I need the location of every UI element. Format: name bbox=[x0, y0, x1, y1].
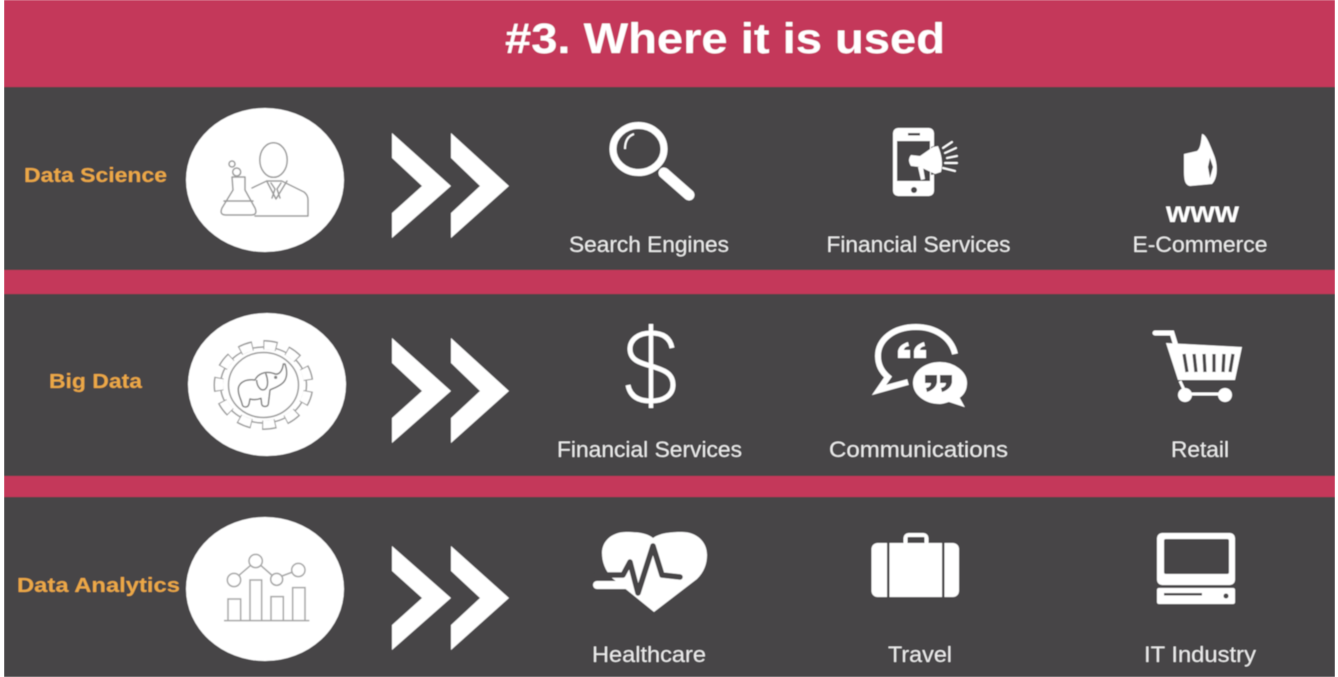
item: financial services: Financial Services bbox=[826, 232, 1010, 257]
item: retail bbox=[1155, 333, 1242, 462]
category label: data analytics: Data Analytics bbox=[17, 574, 180, 597]
panel: data analytics row bbox=[4, 497, 1335, 677]
icon: magnifying glass bbox=[613, 126, 689, 195]
arrows: double chevron bbox=[392, 338, 509, 443]
item: communications: Communications bbox=[829, 437, 1008, 462]
icon: shopping cart bbox=[1155, 333, 1242, 402]
circle icon: scientist bbox=[186, 108, 344, 252]
item: financial services bbox=[826, 128, 1010, 257]
item: financial services: Financial Services bbox=[557, 437, 742, 462]
icon: suitcase bbox=[872, 535, 959, 597]
item: financial services bbox=[557, 324, 742, 462]
item: e-commerce bbox=[1132, 134, 1268, 257]
item: e-commerce: E-Commerce bbox=[1132, 232, 1268, 257]
arrows: double chevron bbox=[392, 133, 509, 238]
item: healthcare: Healthcare bbox=[592, 642, 706, 667]
arrows: double chevron bbox=[392, 546, 509, 650]
divider band 2 bbox=[4, 476, 1335, 497]
icon: phone with megaphone bbox=[893, 128, 957, 196]
icon: www: www bbox=[1165, 196, 1240, 229]
icon: dollar sign bbox=[628, 324, 673, 408]
panel: big data row bbox=[4, 294, 1335, 476]
category label: big data: Big Data bbox=[49, 370, 143, 393]
item: it industry bbox=[1144, 533, 1256, 667]
item: search engines: Search Engines bbox=[569, 232, 729, 257]
item: communications bbox=[829, 327, 1008, 462]
circle icon: gear with elephant bbox=[188, 313, 346, 456]
item: it industry: IT Industry bbox=[1144, 642, 1256, 667]
circle icon: chart bbox=[186, 517, 344, 661]
icon: speech bubbles bbox=[878, 327, 968, 409]
panel: data science row bbox=[4, 87, 1335, 270]
title: #3. Where it is used bbox=[505, 15, 945, 63]
item: travel: Travel bbox=[888, 642, 952, 667]
category label: data science: Data Science bbox=[24, 164, 167, 187]
item: retail: Retail bbox=[1171, 437, 1229, 462]
icon: heart with pulse bbox=[596, 532, 707, 612]
icon: thumbs up bbox=[1184, 134, 1217, 186]
header band bbox=[4, 0, 1335, 87]
icon: computer bbox=[1157, 533, 1235, 604]
item: search engines bbox=[569, 126, 729, 257]
item: travel bbox=[872, 535, 959, 667]
divider band 1 bbox=[4, 270, 1335, 294]
item: healthcare bbox=[592, 532, 707, 667]
